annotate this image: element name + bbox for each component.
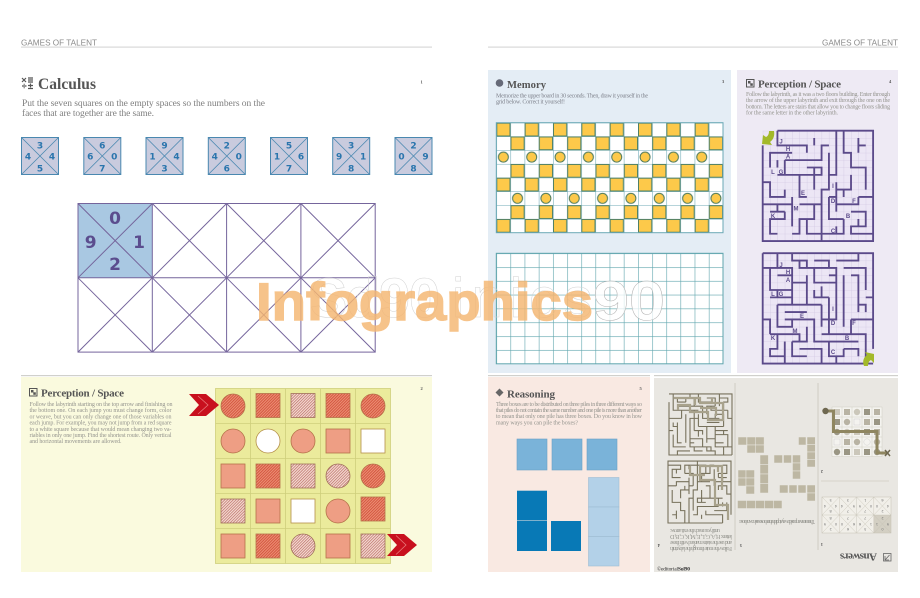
labyrinth upper: C	[831, 229, 836, 235]
answer number: 5	[739, 543, 742, 548]
ghost outline text	[310, 266, 592, 329]
answer grid: calculus: 0	[840, 522, 843, 526]
answer grid: calculus: 1	[870, 522, 872, 526]
row 1	[221, 394, 385, 418]
square 3	[146, 138, 183, 174]
instructions: grid below. Correct it yourself!	[496, 98, 565, 106]
answer grid: calculus: 1	[876, 522, 878, 526]
cell digits: 0	[109, 209, 121, 229]
answer grid: calculus: 9	[858, 504, 861, 508]
labyrinth upper: K	[771, 214, 776, 220]
right page header: GAMES OF TALENT	[822, 38, 898, 48]
labyrinth of shapes	[216, 388, 390, 564]
empty answer grid	[496, 253, 723, 364]
square 7: 9	[422, 152, 429, 162]
labyrinth lower	[763, 253, 873, 364]
panel: perception space lilac	[737, 70, 898, 373]
answer grid: calculus: 1	[864, 498, 866, 502]
answer grid: calculus: 9	[823, 522, 826, 526]
boxes: second arrangement	[517, 491, 581, 551]
square 1: 5	[37, 164, 43, 174]
square 1: 3	[37, 142, 43, 152]
orange brand word: Infographics	[256, 273, 593, 332]
square 6	[333, 138, 370, 174]
instructions: each jump. For example, you may not jump from a red square	[30, 420, 172, 427]
square 5	[270, 138, 308, 174]
arrow: start chevron	[189, 394, 219, 416]
page number: 3	[722, 79, 725, 84]
instructions: Memorize the upper board in 30 seconds. Then, draw it yourself in the	[496, 92, 648, 100]
labyrinth upper: D	[831, 199, 836, 205]
labyrinth lower: B	[845, 336, 850, 342]
instruction text: Put the seven squares on the empty spaces so the numbers on the	[22, 99, 265, 109]
big empty grid	[78, 204, 375, 352]
row 4	[221, 497, 385, 523]
square 3: 9	[161, 142, 168, 152]
filled blue cell	[78, 204, 152, 278]
answer grid: calculus: 2	[881, 509, 884, 513]
square 1: 4	[49, 152, 55, 162]
title: Perception / Space	[41, 388, 124, 400]
labyrinth lower: I	[832, 307, 834, 313]
icon: math symbols	[22, 78, 33, 88]
instruction text: faces that are together are the same.	[22, 108, 154, 119]
answer grid: perception	[822, 407, 890, 456]
title: Memory	[507, 80, 547, 91]
answer grid: calculus: 6	[858, 522, 861, 526]
panel: memory	[488, 70, 731, 373]
instructions: and horizontal movements are allowed.	[30, 439, 122, 445]
title: calculus: Calculus	[38, 76, 96, 93]
instructions	[30, 401, 172, 445]
cell digits: 1	[133, 233, 145, 253]
labyrinth lower: J	[779, 263, 783, 269]
labyrinth lower: C	[831, 350, 836, 356]
instructions: Follow the labyrinth, as it was a two floors building. Enter through	[746, 91, 890, 98]
labyrinth upper: L	[771, 170, 775, 176]
instructions: bottom. The letters are stairs that allow you to change floors sliding	[746, 103, 890, 110]
answer grid: calculus: 2	[881, 516, 884, 520]
square 7: 8	[410, 164, 417, 174]
credit: ©editorialSol90	[657, 566, 690, 572]
white outlined number: 90	[593, 269, 665, 332]
square 3: 1	[149, 152, 156, 162]
boxes: first arrangement	[517, 439, 617, 470]
square 4: 4	[212, 152, 218, 162]
memory board	[496, 123, 723, 233]
answer grid: calculus: 7	[864, 516, 866, 520]
square 2: 7	[99, 164, 105, 174]
panel: reasoning	[488, 375, 650, 572]
square 1	[22, 138, 58, 174]
instructions	[496, 92, 648, 106]
answer grid: calculus: 2	[829, 527, 832, 531]
row 2	[221, 429, 385, 453]
instructions: Three boxes are to be distributed on three piles in three different ways so	[496, 401, 642, 408]
upside-down answer caption	[669, 527, 732, 551]
answer grid: calculus: 4	[840, 504, 843, 508]
labyrinth lower: L	[771, 292, 775, 298]
square 5: 1	[274, 152, 280, 162]
answer boxes pieces	[738, 437, 815, 508]
answer grid: calculus: 8	[829, 509, 832, 513]
instructions: riables in only one jump. Find the shortest route. Only vertical	[30, 433, 172, 439]
square 4: 2	[224, 142, 230, 152]
answer number: 1	[820, 542, 823, 547]
upside-down caption under pieces: There are seven possible ways to pile the three boxes as shown above.	[738, 518, 815, 524]
panel: perception space yellow	[21, 375, 432, 572]
labyrinth lower: M	[792, 329, 798, 335]
answer grid: calculus: 7	[847, 509, 849, 513]
labyrinth upper: E	[801, 191, 805, 197]
row 5	[221, 534, 385, 558]
left page header: GAMES OF TALENT	[21, 38, 97, 48]
square 1: 4	[25, 152, 31, 162]
square 2	[84, 138, 121, 174]
cell digits	[85, 209, 145, 275]
square 4: 6	[224, 164, 230, 174]
square 6: 8	[348, 164, 354, 174]
answer labyrinth lower	[668, 461, 731, 523]
answer labyrinth upper	[669, 394, 732, 455]
title: Perception / Space	[758, 78, 841, 90]
icon: circle	[496, 79, 503, 87]
answer grid: calculus: 6	[852, 522, 855, 526]
labyrinth lower: D	[831, 321, 836, 327]
instructions: the bottom one. On each jump you must change form, color	[30, 407, 172, 414]
labyrinth upper: J	[779, 140, 783, 146]
labyrinth upper: G	[779, 170, 784, 176]
labyrinth lower: K	[771, 336, 776, 342]
upside-down answer caption: until you reach the exit arrow.	[670, 527, 720, 533]
watermark	[256, 266, 665, 332]
ghost outline text: inics	[452, 266, 592, 329]
instructions: for the same letter in the other labyrinth.	[746, 110, 838, 117]
instructions: that piles do not contain the same number and one pile is more than another	[496, 408, 642, 414]
answer grid: calculus: 0	[875, 504, 878, 508]
boxes: third arrangement	[588, 478, 619, 566]
answer grid: calculus: 5	[829, 498, 832, 502]
icon: diamond	[496, 388, 504, 396]
panel: calculus	[22, 76, 432, 352]
answer grid: calculus: 4	[823, 504, 826, 508]
title: Reasoning	[507, 388, 556, 400]
answer grid: calculus: 3	[847, 498, 849, 502]
answer grid: calculus	[822, 497, 891, 533]
number squares row	[22, 138, 432, 174]
square 6: 9	[336, 152, 342, 162]
instructions: Follow the labyrinth starting on the top arrow and finishing on	[30, 401, 172, 408]
icon: answers box	[884, 554, 891, 561]
labyrinth upper: A	[786, 154, 791, 160]
instructions: to a white square because that would mean changing two va-	[30, 427, 172, 433]
square 4: 0	[236, 152, 242, 162]
labyrinth upper: B	[846, 214, 851, 220]
instructions: the arrow of the upper labyrinth and exit through the one on the	[746, 97, 890, 104]
cell digits: 2	[109, 255, 121, 275]
instruction text	[22, 99, 265, 119]
answer grid: calculus: 0	[869, 504, 872, 508]
labyrinth upper: I	[832, 184, 834, 190]
answer grid: calculus: 5	[864, 527, 866, 531]
square 2: 6	[87, 152, 93, 162]
answer grid: calculus: 9	[886, 522, 889, 526]
square 5: 5	[286, 142, 292, 152]
answer grid: calculus: 0	[834, 522, 837, 526]
labyrinth lower: H	[786, 270, 790, 276]
answer grid: calculus: 9	[852, 504, 855, 508]
square 2: 0	[111, 152, 117, 162]
ghost outline text: Sd90	[310, 266, 440, 329]
instructions	[746, 91, 890, 117]
labyrinth lower: G	[779, 292, 784, 298]
labyrinth lower: F	[852, 321, 856, 327]
square 6: 1	[360, 152, 366, 162]
square 2: 6	[99, 142, 105, 152]
page number: 5	[640, 386, 642, 391]
instructions: to mean that only one pile has three boxes. Do you know in how	[496, 414, 643, 420]
labyrinth upper: M	[794, 206, 798, 212]
answer grid: calculus: 7	[864, 509, 866, 513]
icon: dice square	[746, 80, 754, 87]
labyrinth lower: A	[786, 278, 791, 284]
square 7: 2	[410, 142, 417, 152]
square 6: 3	[348, 142, 354, 152]
instructions: or weave, but you can only change one of those variables on	[30, 413, 172, 420]
answers title upside down: Answers	[839, 550, 877, 562]
labyrinth upper	[763, 131, 873, 241]
upside-down answer caption: letters: H, A, G, L, E, M, K, C, B, D	[669, 533, 732, 539]
answer grid: calculus: 6	[881, 498, 884, 502]
labyrinth upper: H	[786, 147, 790, 153]
page number: 1	[420, 80, 424, 84]
answer number: 4	[657, 543, 660, 548]
cell digits: 9	[85, 233, 97, 253]
answer grid: calculus: 7	[847, 516, 849, 520]
upside-down answer caption: and use the stairs marked with these	[670, 539, 732, 545]
labyrinth upper: F	[852, 199, 856, 205]
square 3: 3	[161, 164, 168, 174]
solution route	[825, 411, 888, 453]
upside-down answer caption: Follow the route through the labyrinth	[670, 545, 732, 551]
square 5: 6	[298, 152, 304, 162]
square 7	[395, 138, 432, 174]
labyrinth lower: E	[800, 314, 804, 320]
answer number: 2	[820, 469, 823, 474]
page number: 4	[889, 79, 892, 84]
row 3	[221, 464, 385, 488]
page number: 2	[420, 386, 424, 391]
square 3: 4	[173, 152, 180, 162]
icon: dice square	[30, 388, 37, 396]
square 7: 0	[398, 152, 405, 162]
icon: green exit arrow	[863, 352, 874, 366]
arrow: finish chevron	[387, 534, 417, 556]
square 5: 7	[286, 164, 292, 174]
answer grid: calculus: 6	[846, 527, 849, 531]
answer grid: calculus: 4	[886, 504, 889, 508]
answer grid: calculus: 0	[881, 527, 884, 531]
instructions: many ways you can pile the boxes?	[496, 420, 578, 426]
icon: green entry arrow	[762, 131, 774, 145]
answer grid: calculus: 8	[829, 516, 832, 520]
panel: answers	[654, 375, 898, 572]
instructions	[496, 401, 643, 426]
answer grid: calculus: 4	[834, 504, 837, 508]
square 4	[208, 138, 245, 174]
